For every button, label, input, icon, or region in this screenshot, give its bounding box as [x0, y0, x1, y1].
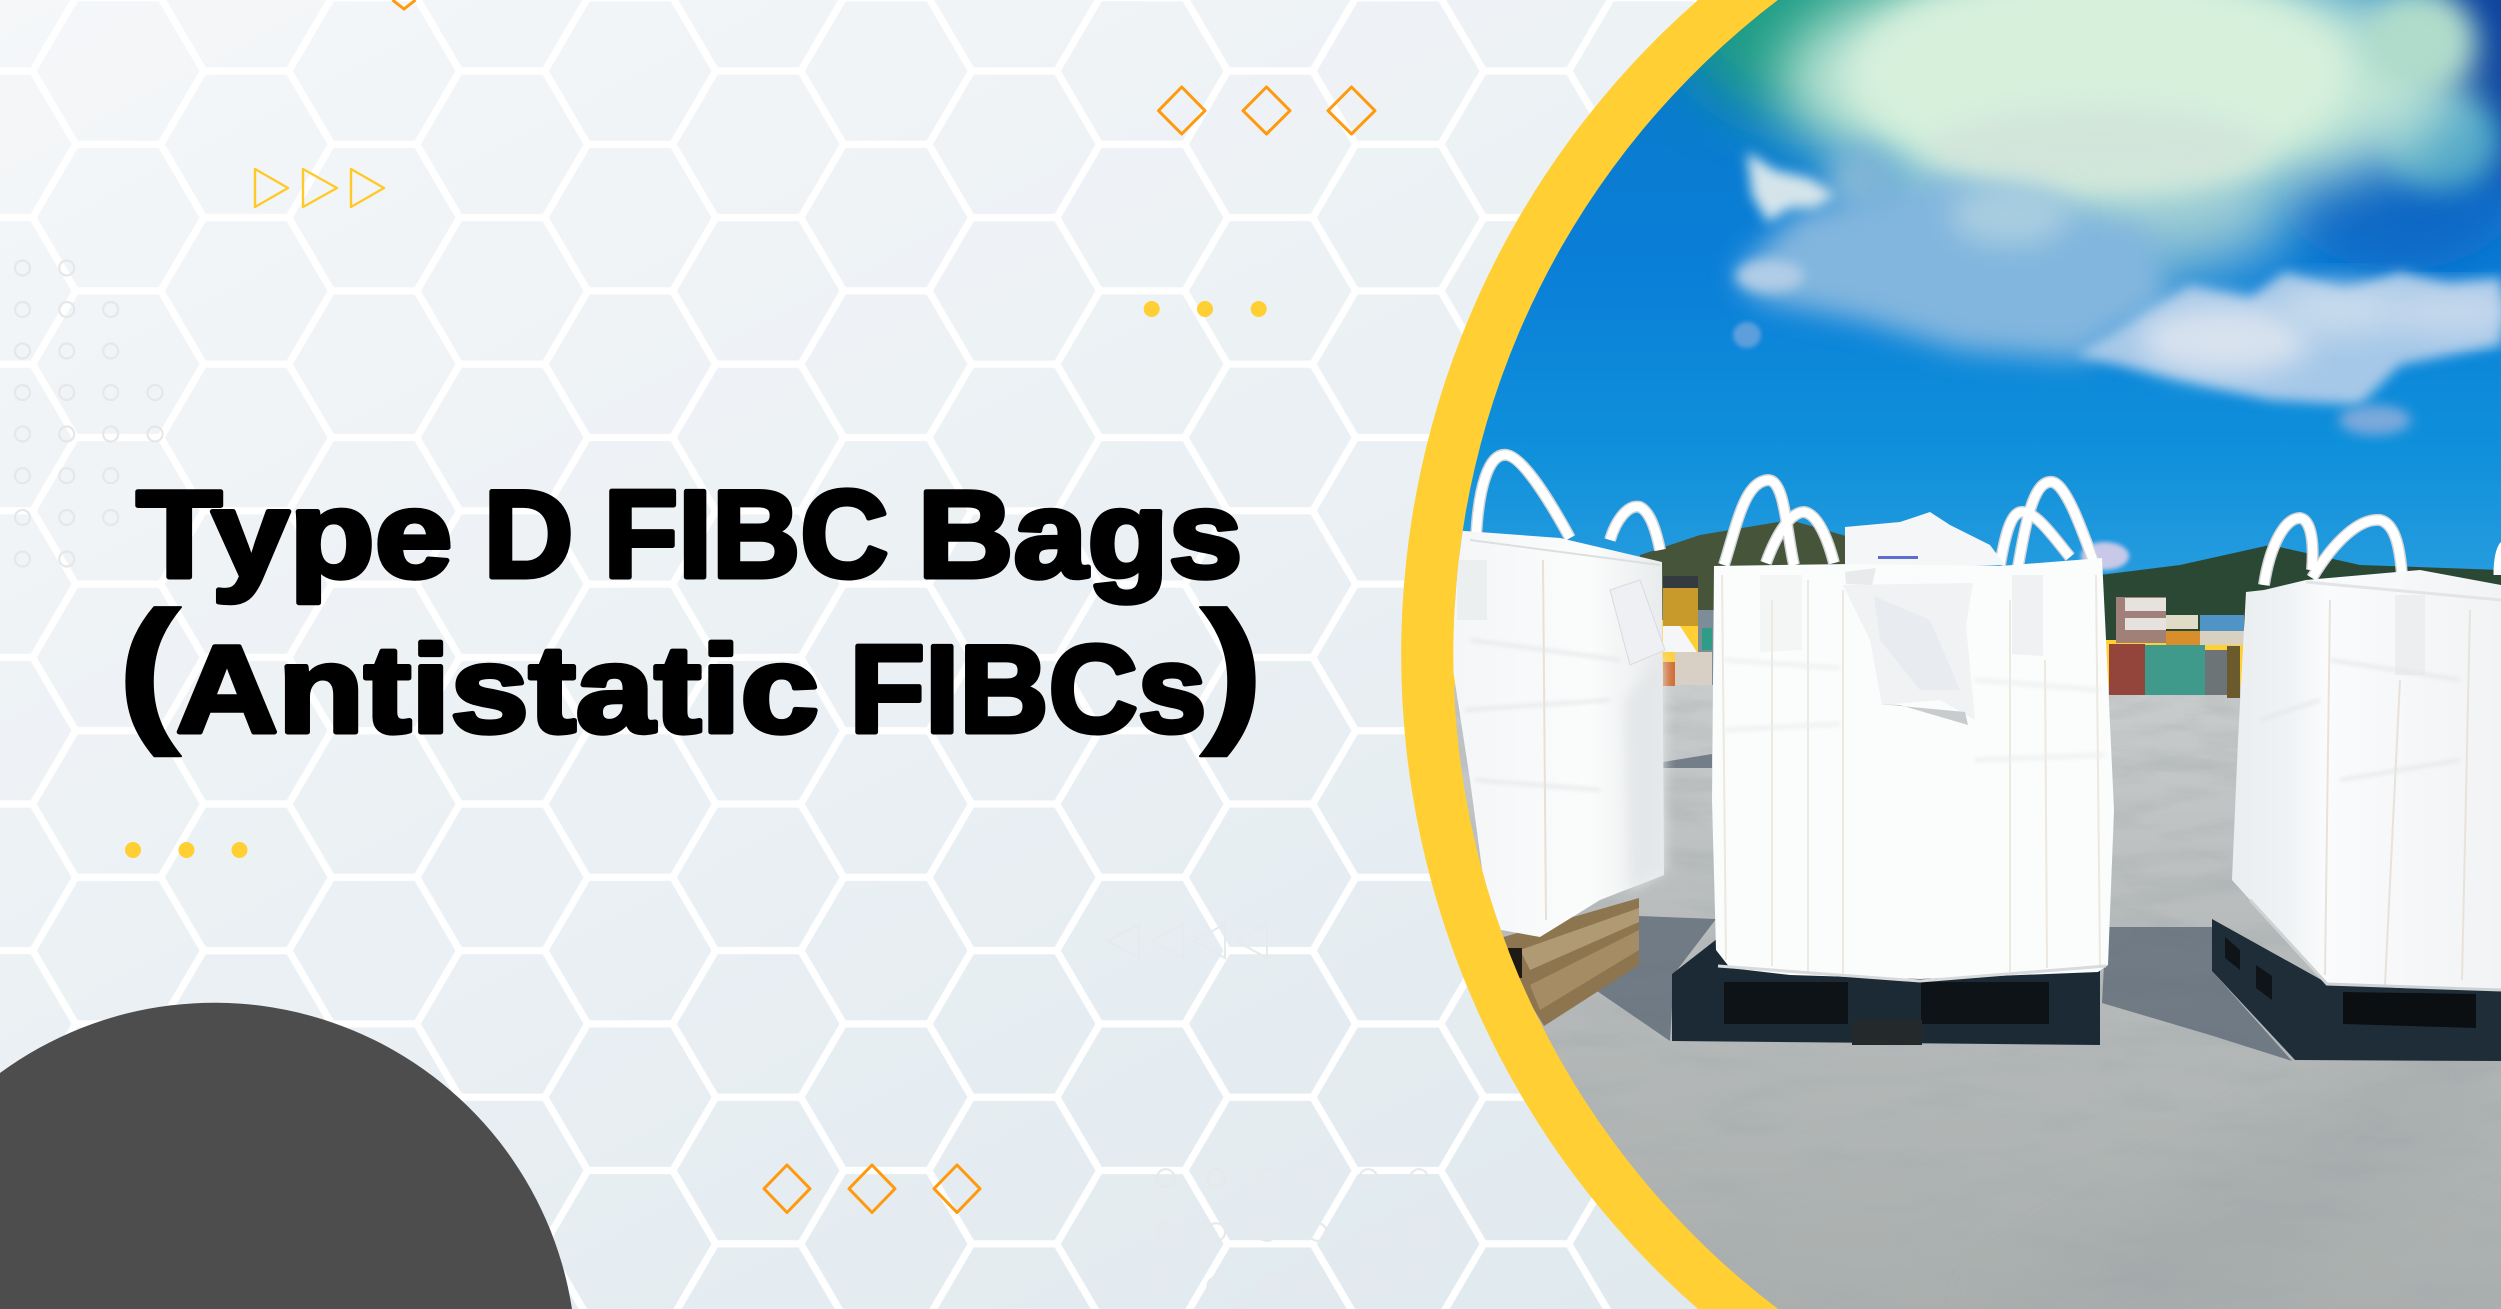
shadows	[1597, 754, 2292, 1061]
icon: orange diamonds bottom	[764, 1165, 980, 1212]
title	[117, 466, 1264, 759]
bag: center	[1712, 480, 2114, 981]
icon: yellow dots top	[1144, 301, 1267, 317]
icon: yellow outlined triangles	[255, 169, 384, 207]
hills	[1640, 520, 2501, 640]
yellow ring frame	[1401, 0, 2501, 1309]
dark semicircle bottom left	[0, 1003, 572, 1309]
title: FIBC	[604, 466, 888, 604]
containers	[1663, 576, 2244, 698]
title: Bags	[918, 466, 1242, 604]
ground	[1400, 685, 2501, 1309]
title: Type	[136, 466, 452, 604]
decorative ring grid: left	[15, 260, 162, 566]
icon: yellow dots left	[125, 842, 248, 858]
title: Antistatic	[176, 621, 819, 759]
icon: faint left-pointing triangles	[1108, 924, 1267, 958]
photo: FIBC bags at a port yard	[1400, 0, 2501, 1309]
title: )	[1200, 578, 1264, 757]
pallet: black center	[1672, 935, 2100, 1045]
decorative ring grid: bottom right	[1157, 1169, 1428, 1295]
clouds	[1733, 0, 2501, 570]
icon: orange diamond cut by top edge	[392, 0, 416, 9]
title: (	[117, 578, 182, 757]
icon: orange diamonds top	[1158, 87, 1375, 134]
bag: right	[2232, 518, 2501, 990]
sky	[1400, 0, 2501, 600]
pallet: black right	[2212, 919, 2501, 1061]
bag: left	[1450, 455, 1665, 937]
pallet: wooden left	[1500, 898, 1639, 1026]
title: FIBCs	[850, 621, 1206, 759]
title: D	[484, 466, 574, 604]
